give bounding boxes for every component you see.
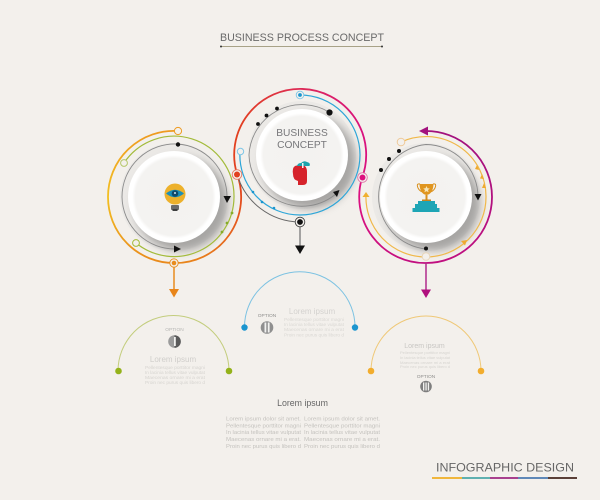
disc with shadow: centre (248, 101, 356, 209)
bottom body text: Proin nec purus quis libero d (226, 444, 301, 450)
business concept label: BUSINESS (276, 128, 328, 139)
text block: Pellentesque porttitor magni (145, 365, 205, 370)
text block: Proin nec purus quis libero d (145, 380, 206, 385)
yellow semicircle (368, 316, 484, 374)
text block (145, 355, 206, 385)
text block: Pellentesque porttitor magni (400, 350, 450, 355)
orange arc (362, 137, 486, 260)
panel: right circle (359, 126, 492, 298)
node: orange open (174, 127, 182, 135)
node: pink junction (358, 173, 367, 182)
panel: left option (115, 316, 232, 385)
bottom body text: Proin nec purus quis libero d (304, 444, 380, 450)
panel: centre option (241, 272, 358, 338)
text block: Maecenas ornare mi a erat (145, 375, 206, 380)
blue semicircle (241, 272, 358, 331)
text block: Lorem ipsum (150, 355, 196, 364)
text block (284, 307, 345, 338)
option label: OPTION (165, 327, 184, 333)
text block: Maecenas ornare mi a erat (284, 327, 345, 332)
business concept label: CONCEPT (277, 140, 327, 151)
grey arc with dots (249, 105, 340, 206)
connector and arrow: left (169, 259, 179, 298)
icon: option 2 (261, 321, 273, 334)
bottom body text: Pellentesque porttitor magni (304, 424, 380, 430)
option label: OPTION (258, 313, 277, 319)
outer orange arc (108, 131, 241, 263)
text block: Lorem ipsum (404, 343, 445, 350)
icon: head with cloud (293, 161, 310, 185)
text block: In lacinia tellus vitae vulputat (145, 370, 206, 375)
connector and arrow: centre (295, 217, 305, 254)
text block: Proin nec purus quis libero d (400, 364, 450, 369)
text block: Maecenas ornare mi a erat (400, 360, 451, 365)
grey arc with dots (379, 144, 482, 250)
bottom body text: In lacinia tellus vitae vulputat (304, 430, 380, 436)
option label: OPTION (417, 374, 436, 380)
green arc (121, 136, 234, 257)
icon: light bulb with eye (164, 184, 186, 211)
bottom body text: Lorem ipsum dolor sit amet. (226, 416, 301, 422)
connector and arrow: right (421, 263, 431, 298)
bottom body text: In lacinia tellus vitae vulputat (226, 430, 301, 436)
text block: In lacinia tellus vitae vulputat (400, 355, 451, 360)
icon: option 3 (420, 381, 432, 392)
disc with shadow: right (372, 143, 480, 251)
text block: Pellentesque porttitor magni (284, 317, 344, 322)
bottom body text: Pellentesque porttitor magni (226, 424, 301, 430)
green semicircle (115, 316, 232, 374)
text block: In lacinia tellus vitae vulputat (284, 322, 345, 327)
outer purple arc (359, 126, 492, 263)
bottom heading: Lorem ipsum (277, 398, 328, 408)
text block (400, 343, 451, 369)
text block: Lorem ipsum (289, 307, 335, 316)
bottom body text: Lorem ipsum dolor sit amet. (304, 416, 380, 422)
text block: Proin nec purus quis libero d (284, 332, 345, 338)
bottom body text (226, 416, 380, 450)
panel: left circle (108, 127, 241, 298)
disc with shadow: left (120, 143, 228, 251)
footer title: INFOGRAPHIC DESIGN (436, 460, 574, 474)
blue arc (237, 91, 360, 215)
bottom body text: Maecenas ornare mi a erat. (226, 437, 301, 443)
panel: centre circle (234, 89, 366, 254)
bottom text block (226, 398, 380, 450)
dark grey lower arc (237, 174, 300, 222)
outer red-pink arc (234, 89, 366, 178)
title: BUSINESS PROCESS CONCEPT (220, 32, 385, 44)
icon: trophy on podium (412, 184, 440, 212)
node: red junction (232, 170, 242, 179)
panel: right option (368, 316, 484, 392)
grey arcs with arrows (122, 142, 231, 252)
icon: option 1 (168, 335, 181, 348)
business concept label (276, 128, 328, 151)
bottom body text: Maecenas ornare mi a erat. (304, 437, 380, 443)
